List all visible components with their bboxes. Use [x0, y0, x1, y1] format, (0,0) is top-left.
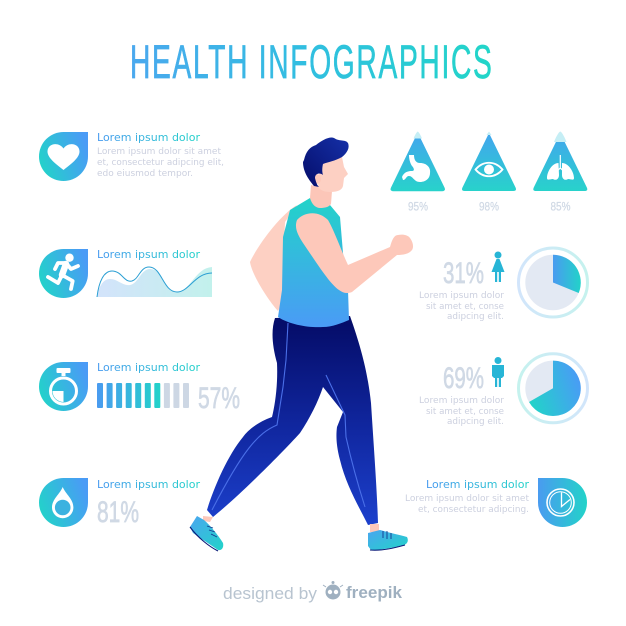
shoe: back — [190, 516, 223, 551]
text block: edo eiusmod tempor. — [97, 169, 193, 179]
pants — [207, 316, 378, 525]
icon: runner — [39, 249, 88, 298]
icon: heart — [39, 132, 88, 181]
icon: water drop — [39, 478, 88, 527]
title: HEALTH INFOGRAPHICS — [130, 37, 494, 89]
text block: sit amet et, conse — [426, 407, 504, 417]
pie chart — [518, 354, 588, 423]
panel: male share — [419, 354, 588, 427]
panel: organs — [391, 132, 587, 214]
value: 98% — [479, 200, 499, 214]
panel: water — [39, 478, 201, 529]
footer credit: designed by — [223, 584, 318, 603]
shoe: front — [368, 530, 408, 550]
heading: Lorem ipsum dolor — [97, 249, 201, 261]
value: 31% — [443, 257, 484, 290]
panel: heart — [39, 132, 224, 181]
text block — [405, 494, 530, 515]
icon: freepik logo — [323, 581, 343, 600]
text block: Lorem ipsum dolor — [419, 396, 505, 406]
text block — [419, 291, 505, 322]
footer credit — [223, 581, 403, 603]
text block: sit amet et, conse — [426, 302, 504, 312]
triangle: stomach — [391, 132, 445, 191]
icon: female — [492, 252, 504, 282]
pie chart — [518, 248, 588, 317]
progress bar — [97, 383, 189, 408]
wordmark: freepik — [346, 583, 403, 602]
panel: stopwatch — [39, 362, 240, 415]
ear — [313, 174, 321, 184]
icon: male — [492, 357, 504, 387]
triangle: lungs — [533, 132, 587, 191]
text block: adipcing elit. — [447, 312, 504, 322]
heading: Lorem ipsum dolor — [97, 479, 201, 491]
text block — [419, 396, 505, 427]
text block: adipcing elit. — [447, 417, 504, 427]
back arm — [250, 205, 297, 311]
triangle: eye — [462, 132, 516, 191]
text block: Lorem ipsum dolor sit amet — [405, 494, 530, 504]
heading: Lorem ipsum dolor — [97, 132, 201, 144]
tank top — [278, 198, 349, 327]
value: 81% — [97, 496, 139, 529]
panel: female share — [419, 248, 588, 322]
value: 57% — [198, 382, 240, 415]
heading: Lorem ipsum dolor — [97, 362, 201, 374]
ankles — [203, 516, 379, 532]
text block: Lorem ipsum dolor sit amet — [97, 147, 222, 157]
front arm — [296, 213, 413, 293]
value: 85% — [550, 200, 571, 214]
icon: clock — [538, 478, 587, 527]
text block: Lorem ipsum dolor — [419, 291, 505, 301]
head — [318, 157, 348, 192]
panel: activity — [39, 249, 212, 298]
value: 69% — [443, 362, 484, 395]
neck — [310, 185, 332, 208]
hair — [303, 137, 349, 187]
panel: clock — [405, 478, 587, 527]
leg seams — [212, 323, 365, 510]
heading: Lorem ipsum dolor — [426, 479, 530, 491]
text block — [97, 147, 224, 179]
icon: stopwatch — [39, 362, 88, 411]
text block: et, consectetur adipcing elit, — [97, 158, 224, 168]
area chart — [97, 267, 212, 297]
value: 95% — [408, 200, 428, 214]
character: runner — [190, 137, 413, 551]
text block: et, consectetur adipcing. — [418, 505, 529, 515]
